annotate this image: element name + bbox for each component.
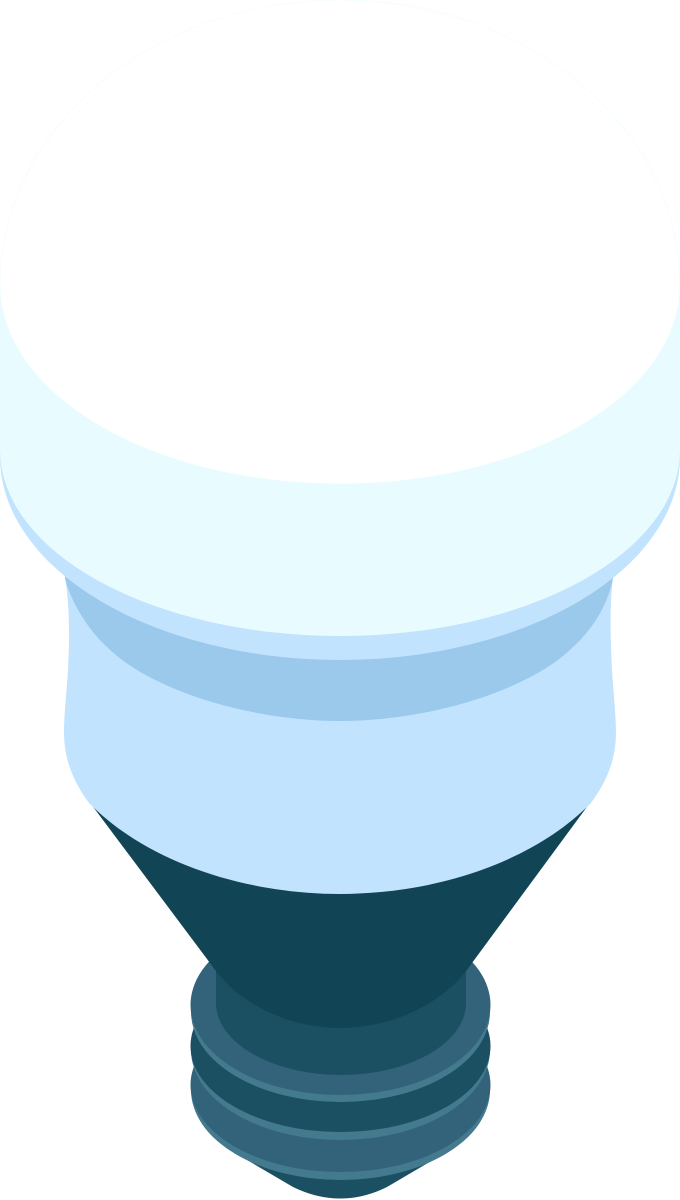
second thread — [190, 960, 490, 1140]
neck — [64, 578, 616, 894]
dome — [0, 0, 680, 484]
first thread — [190, 915, 490, 1102]
base collar — [216, 955, 466, 1075]
screw base — [190, 915, 490, 1198]
shade band — [0, 285, 680, 636]
neck shadow — [65, 560, 613, 721]
base tip — [230, 1150, 450, 1198]
dome inner highlight — [216, 40, 464, 182]
shade rim — [0, 440, 680, 660]
dark cone — [88, 800, 592, 1028]
third thread — [190, 998, 490, 1180]
